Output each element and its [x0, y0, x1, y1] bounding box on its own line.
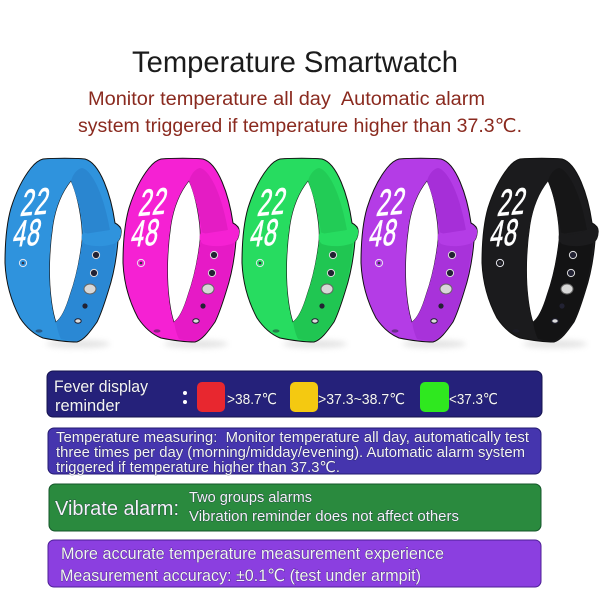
accuracy text: Measurement accuracy: ±0.1℃ (test under armpit) [60, 566, 421, 585]
green band [242, 158, 358, 348]
black band: 22 [494, 181, 530, 228]
blue band [5, 158, 121, 348]
blue band: 22 [17, 181, 53, 228]
colon [183, 391, 187, 404]
vibrate text [189, 490, 459, 525]
green band: 48 [246, 212, 282, 259]
vibrate text: Vibration reminder does not affect others [189, 509, 459, 525]
accuracy text [60, 544, 444, 585]
pink band [123, 158, 239, 348]
title: Temperature Smartwatch [132, 46, 458, 79]
yellow swatch [290, 382, 318, 412]
green band: 22 [254, 181, 290, 228]
measuring text [56, 429, 530, 476]
red label: >38.7℃ [227, 391, 277, 408]
fever heading [54, 377, 148, 415]
blue band: 48 [9, 212, 45, 259]
purple band: 22 [373, 181, 409, 228]
fever heading: reminder [55, 396, 120, 415]
measuring text: Temperature measuring: Monitor temperature all day, automatically test [56, 429, 530, 446]
vibrate text: Two groups alarms [189, 490, 312, 506]
panel: vibrate alarm [49, 484, 541, 531]
pink band: 48 [127, 212, 163, 259]
measuring text: three times per day (morning/midday/evening). Automatic alarm system [56, 444, 525, 461]
subtitle: Monitor temperature all day Automatic alarm [88, 89, 485, 110]
black band: 48 [486, 212, 522, 259]
fever heading: Fever display [54, 377, 148, 396]
panel: temperature measuring [48, 428, 541, 476]
measuring text: triggered if temperature higher than 37.3℃. [56, 459, 340, 476]
purple band: 48 [365, 212, 401, 259]
green swatch [420, 382, 449, 412]
subtitle: system triggered if temperature higher than 37.3℃. [78, 116, 522, 137]
pink band: 22 [135, 181, 171, 228]
green label: <37.3℃ [449, 391, 498, 408]
black band [482, 158, 598, 348]
accuracy text: More accurate temperature measurement experience [61, 544, 444, 563]
yellow label: >37.3~38.7℃ [318, 391, 405, 408]
vibrate heading: Vibrate alarm: [55, 498, 179, 520]
subtitle [78, 89, 522, 137]
purple band [361, 158, 477, 348]
panel: accuracy [48, 540, 541, 587]
panel: fever display reminder [47, 371, 542, 417]
red swatch [197, 382, 225, 412]
